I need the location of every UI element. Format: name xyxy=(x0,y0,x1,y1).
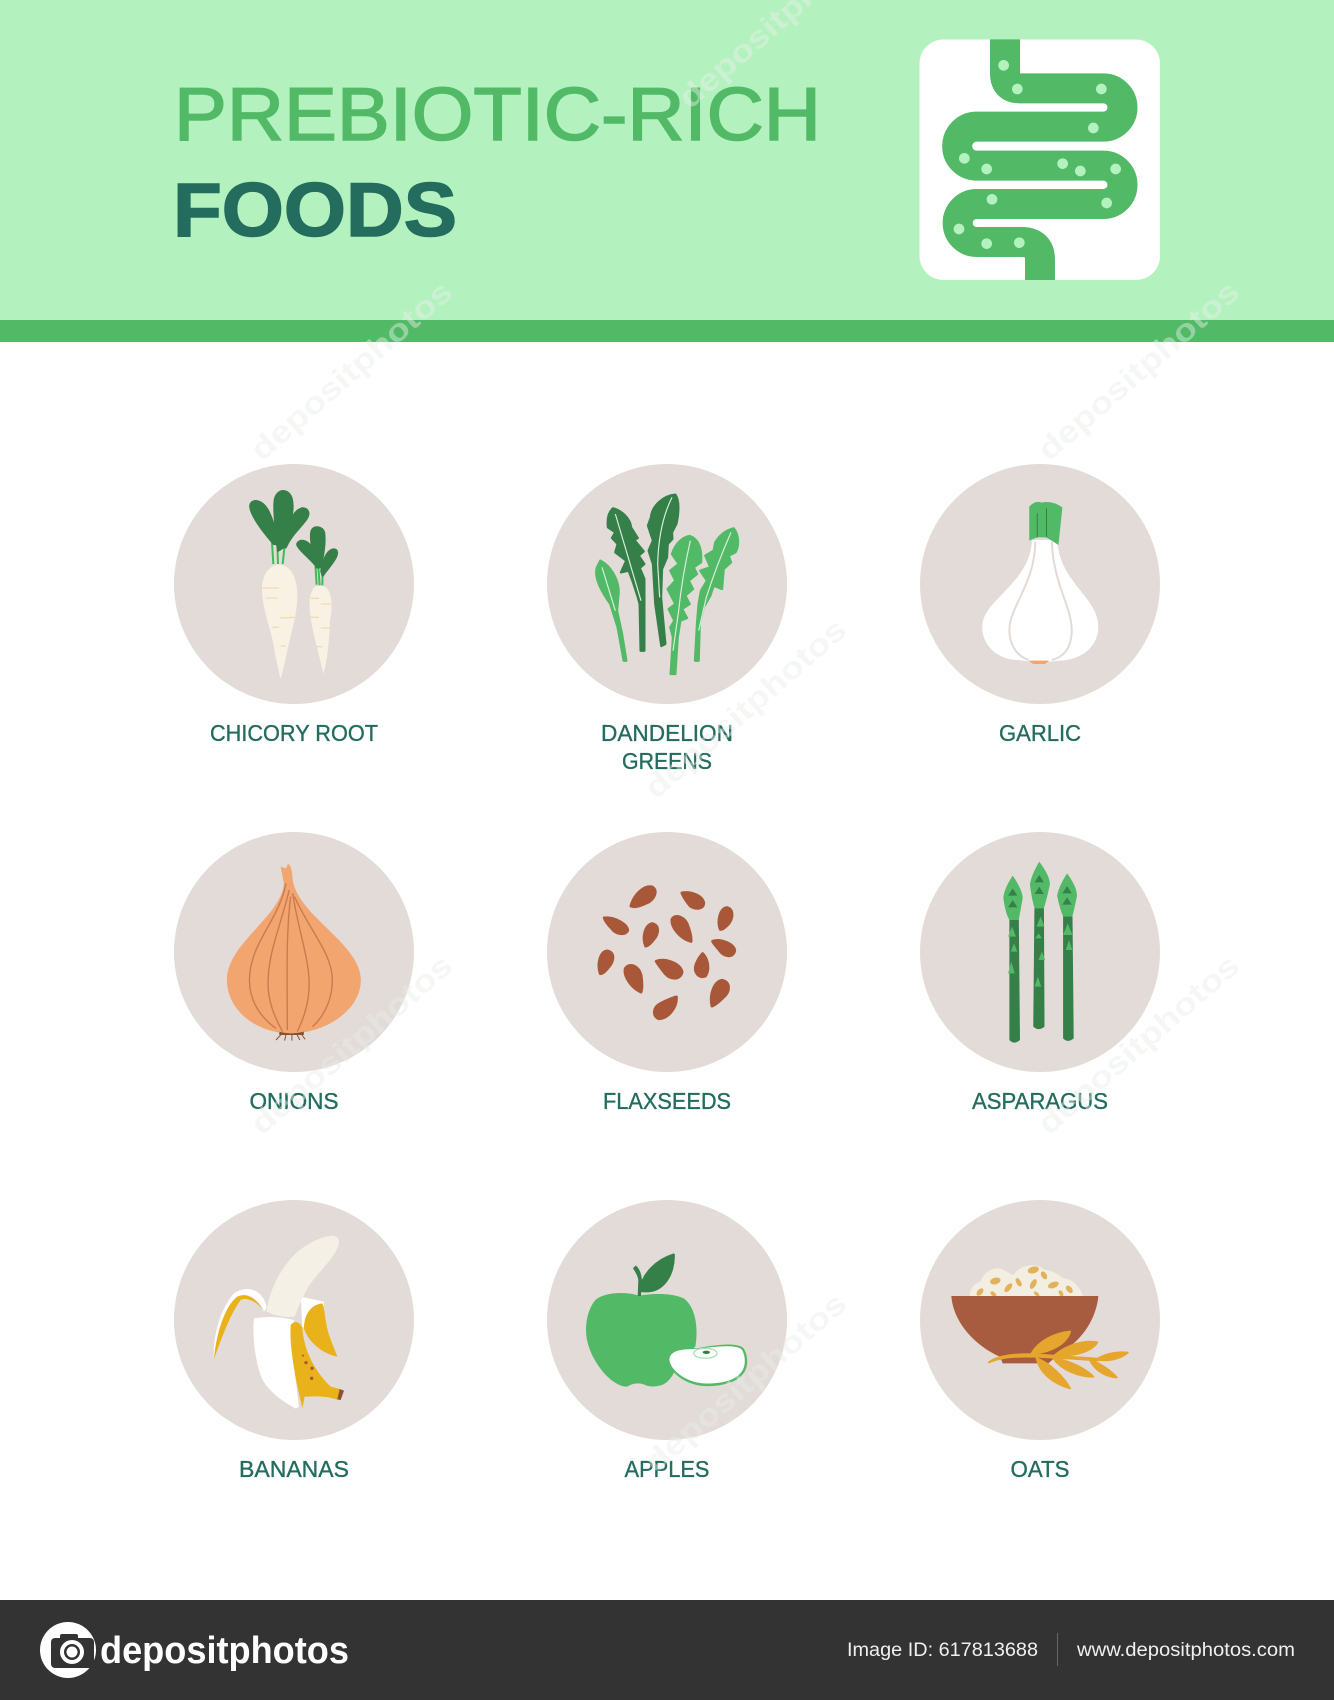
icon: green apple xyxy=(586,1255,747,1387)
label: dandelion greens: GREENS xyxy=(622,748,712,774)
panel: chicory root xyxy=(174,464,414,746)
icon: garlic bulb xyxy=(982,502,1098,664)
watermark: depositphotos xyxy=(638,1286,853,1479)
label: chicory root: CHICORY ROOT xyxy=(210,720,378,746)
panel: onions xyxy=(174,832,414,1114)
label: oats: OATS xyxy=(1010,1456,1070,1482)
panel: flaxseeds xyxy=(547,832,787,1114)
title: FOODS xyxy=(173,168,457,253)
watermark: depositphotos xyxy=(638,612,853,805)
icon: flaxseeds xyxy=(599,887,735,1019)
panel: apples xyxy=(547,1200,787,1482)
icon: onion xyxy=(227,864,361,1041)
watermark xyxy=(244,0,1246,1479)
watermark: depositphotos xyxy=(1031,948,1246,1141)
icon: intestine tile xyxy=(920,39,1160,280)
panel: oats xyxy=(920,1200,1160,1482)
title xyxy=(173,72,821,253)
label: dandelion greens: DANDELION xyxy=(601,720,733,746)
header band xyxy=(0,0,1334,342)
watermark: depositphotos xyxy=(244,948,459,1141)
website: www.depositphotos.com xyxy=(1076,1640,1295,1661)
panel: asparagus xyxy=(920,832,1160,1114)
label: asparagus: ASPARAGUS xyxy=(972,1088,1108,1114)
watermark: depositphotos xyxy=(1031,274,1246,467)
image id: Image ID: 617813688 xyxy=(847,1640,1038,1661)
label: bananas: BANANAS xyxy=(239,1456,349,1482)
icon: peeled banana xyxy=(214,1236,344,1408)
title: PREBIOTIC-RICH xyxy=(174,72,821,156)
icon: asparagus spears xyxy=(1003,862,1077,1043)
footer bar xyxy=(0,1600,1334,1700)
icon: chicory roots xyxy=(250,491,337,679)
icon: dandelion leaves xyxy=(596,495,738,674)
panel: bananas xyxy=(174,1200,414,1482)
label: apples: APPLES xyxy=(624,1456,710,1482)
logo wordmark: depositphotos xyxy=(100,1630,349,1672)
label: flaxseeds: FLAXSEEDS xyxy=(603,1088,731,1114)
label: dandelion greens xyxy=(601,720,733,774)
label: garlic: GARLIC xyxy=(999,720,1081,746)
label: onions: ONIONS xyxy=(250,1088,338,1114)
icon: bowl of oats xyxy=(951,1265,1128,1388)
icon: camera logo xyxy=(40,1622,96,1678)
watermark: depositphotos xyxy=(244,274,459,467)
panel: garlic xyxy=(920,464,1160,746)
panel: dandelion greens xyxy=(547,464,787,774)
